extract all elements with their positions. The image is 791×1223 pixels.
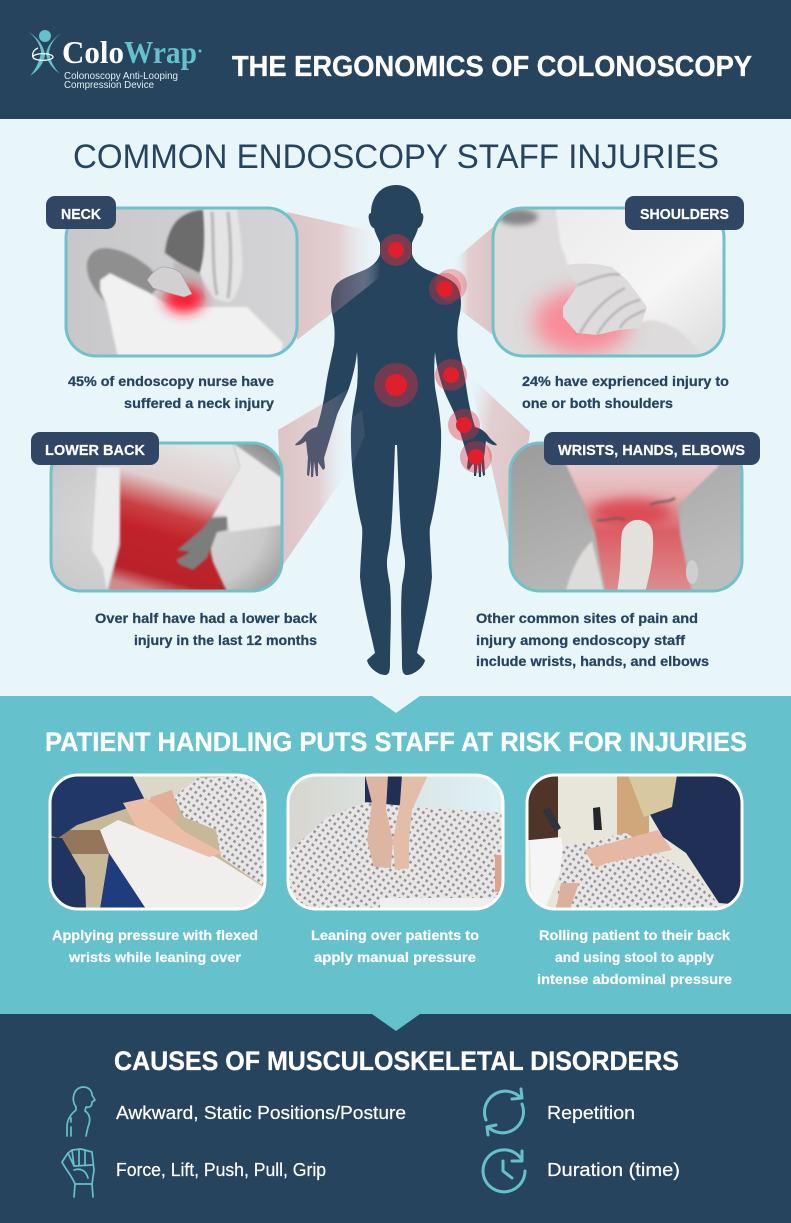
caption: flexed wrists: wrists while leaning over (68, 949, 242, 965)
text: force: Force, Lift, Push, Pull, Grip (116, 1160, 326, 1180)
caption: neck: suffered a neck injury (124, 395, 274, 411)
beam: lower back (278, 390, 352, 565)
caption: manual pressure (311, 927, 479, 965)
caption: flexed wrists: Applying pressure with flexed (52, 927, 258, 943)
pain point: wrist (448, 409, 480, 441)
caption: shoulders: 24% have exprienced injury to (522, 373, 729, 389)
caption: manual pressure: apply manual pressure (314, 949, 476, 965)
pain point: elbow (435, 359, 467, 391)
title: THE ERGONOMICS OF COLONOSCOPY (232, 51, 752, 83)
caption: wrists, hands, elbows: injury among endoscopy staff (476, 632, 685, 648)
notch arrow (372, 696, 420, 713)
caption: lower back: Over half have had a lower back (95, 610, 317, 626)
caption: wrists, hands, elbows (476, 610, 709, 669)
icon: repetition (484, 1089, 524, 1135)
caption: flexed wrists (52, 927, 258, 965)
logo: ColoWrap: Compression Device (64, 79, 154, 91)
caption: lower back: injury in the last 12 months (134, 632, 317, 648)
logo: ColoWrap: Colo (62, 34, 124, 70)
icon: fist (62, 1149, 94, 1197)
heading: patient handling: PATIENT HANDLING PUTS STAFF AT RISK FOR INJURIES (45, 727, 747, 757)
caption: rolling patient: intense abdominal pressure (537, 971, 732, 987)
text: duration: Duration (time) (547, 1160, 680, 1180)
heading: causes: CAUSES OF MUSCULOSKELETAL DISORDERS (114, 1046, 679, 1076)
panel: common endoscopy staff injuries (0, 119, 791, 696)
caption: manual pressure: Leaning over patients to (311, 927, 479, 943)
caption: rolling patient: Rolling patient to their back (539, 927, 730, 943)
beam: shoulders (452, 227, 493, 335)
caption: wrists, hands, elbows: include wrists, hands, and elbows (476, 653, 709, 669)
caption: rolling patient: and using stool to apply (555, 949, 714, 965)
label: neck (46, 196, 116, 229)
pain point: shoulder (429, 269, 467, 305)
label: wrists, hands, elbows: WRISTS, HANDS, ELBOWS (558, 443, 745, 459)
label: wrists, hands, elbows (544, 432, 760, 465)
icon: posture (67, 1087, 95, 1136)
photo: flexed wrists (50, 775, 265, 909)
text: awkward positions: Awkward, Static Positions/Posture (116, 1103, 406, 1123)
notch arrow (372, 1014, 420, 1031)
panel: patient handling (0, 696, 791, 1014)
logo: ColoWrap (29, 30, 202, 91)
text: repetition: Repetition (547, 1103, 635, 1123)
heading: common injuries: COMMON ENDOSCOPY STAFF INJURIES (73, 138, 719, 176)
photo: wrists, hands, elbows (510, 443, 742, 592)
pain point: hand (460, 441, 492, 473)
logo: ColoWrap: Colonoscopy Anti-Looping (64, 70, 178, 82)
pain point: neck (380, 234, 412, 266)
caption: shoulders: one or both shoulders (522, 395, 673, 411)
photo: lower back (51, 443, 282, 592)
caption: shoulders (522, 373, 729, 411)
header band (0, 0, 791, 119)
human body silhouette (290, 185, 497, 675)
label: lower back (31, 432, 159, 465)
label: shoulders (625, 196, 744, 230)
beam: neck (287, 212, 380, 340)
logo: ColoWrap: Wrap (124, 34, 197, 70)
label: lower back: LOWER BACK (45, 443, 146, 459)
photo: neck (66, 208, 297, 358)
photo: manual pressure (288, 775, 503, 909)
photo: shoulders (493, 206, 724, 358)
caption: neck (68, 373, 274, 411)
caption: neck: 45% of endoscopy nurse have (68, 373, 274, 389)
beam: wrists (467, 373, 530, 560)
panel: causes (0, 1014, 791, 1223)
caption: lower back (95, 610, 317, 648)
pain point: lower back (374, 363, 418, 407)
label: shoulders: SHOULDERS (640, 207, 729, 223)
caption: wrists, hands, elbows: Other common sites of pain and (476, 610, 698, 626)
photo: rolling patient (527, 775, 742, 909)
icon: clock (483, 1150, 525, 1192)
caption: rolling patient (537, 927, 732, 987)
label: neck: NECK (61, 207, 102, 223)
